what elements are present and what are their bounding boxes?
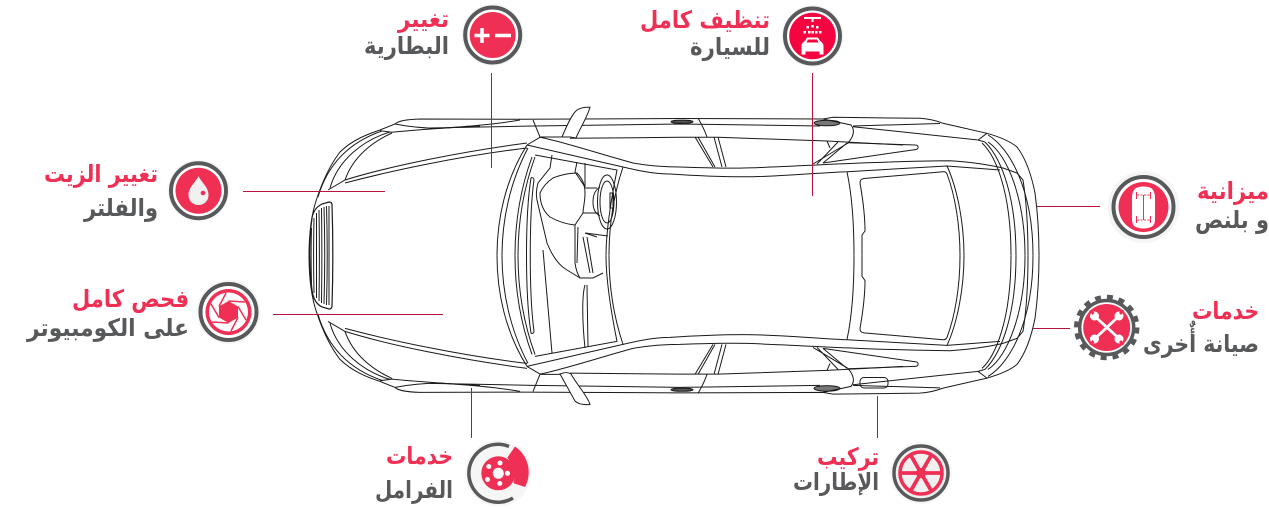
icon: car wash [782, 5, 844, 67]
label: car wash: تنظيف كامل [640, 6, 770, 34]
car top-view line drawing [309, 107, 1039, 405]
wrenches [1089, 310, 1124, 346]
label: alignment [1195, 177, 1269, 234]
fuel door [860, 378, 888, 388]
icon: oil drop [168, 160, 230, 222]
icon: gear with wrenches [1077, 298, 1137, 358]
icon: wheel alignment [1108, 171, 1180, 243]
icon: brake disc [465, 440, 531, 506]
label: oil: تغيير الزيت [44, 160, 158, 188]
side mirror top [562, 107, 590, 138]
item: battery change [364, 4, 524, 66]
label: other maintenance: خدمات [1192, 297, 1259, 325]
label: car wash: للسيارة [690, 33, 770, 61]
front grille [310, 202, 333, 309]
label: battery [364, 5, 449, 60]
label: battery: تغيير [397, 5, 449, 33]
item: tire installation [793, 442, 952, 504]
item: full computer diagnostic [26, 280, 261, 344]
side mirror bottom [560, 372, 590, 405]
label: brakes [375, 442, 453, 504]
label: diagnostic [26, 285, 189, 342]
item: alignment and balancing [1108, 171, 1269, 243]
label: car wash [640, 6, 770, 61]
label: tires: الإطارات [793, 468, 879, 496]
item: brake services [375, 440, 531, 506]
interior: driver seat and cabin [536, 155, 616, 353]
label: oil: والفلتر [83, 194, 158, 222]
icon: tire wheel [890, 442, 952, 504]
label: oil [44, 160, 158, 222]
item: oil and filter [44, 160, 230, 222]
leader lines [243, 73, 1100, 438]
label: diagnostic: على الكومبيوتر [26, 314, 189, 342]
icon: camera aperture [196, 280, 260, 344]
label: diagnostic: فحص كامل [72, 285, 189, 313]
label: tires [793, 443, 879, 496]
label: brakes: الفرامل [375, 476, 453, 504]
label: brakes: خدمات [386, 442, 453, 470]
label: battery: البطارية [364, 32, 449, 60]
item: other maintenance [1077, 297, 1259, 358]
item: full car wash [640, 5, 844, 67]
label: tires: تركيب [817, 443, 879, 471]
interior: wiper slit [526, 178, 534, 333]
label: other maintenance [1143, 297, 1259, 358]
icon: battery plus minus [462, 4, 524, 66]
